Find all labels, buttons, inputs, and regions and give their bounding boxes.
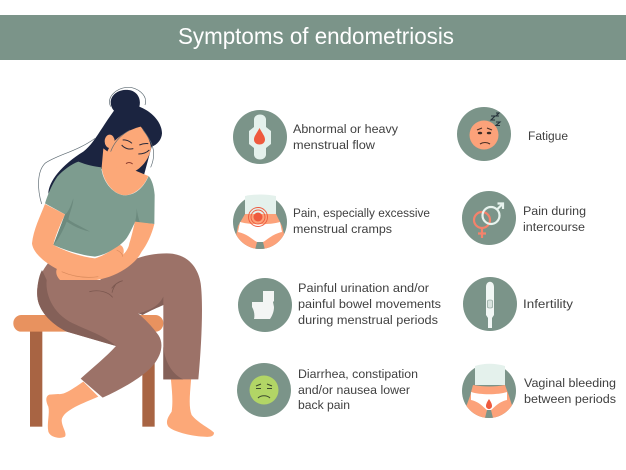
label: Painful urination and/or — [298, 281, 429, 295]
legs and feet — [37, 253, 214, 438]
label — [523, 204, 586, 234]
label — [298, 281, 441, 327]
icon: toilet — [238, 278, 292, 332]
icon: male and female symbols — [462, 191, 516, 245]
t-shirt — [45, 162, 155, 257]
label — [524, 376, 616, 406]
label: Pain, especially excessive — [293, 206, 430, 220]
label: Infertility — [523, 297, 574, 311]
label — [298, 367, 418, 412]
label — [293, 206, 430, 236]
icon: tired orange face — [457, 107, 511, 161]
item: menstrual cramps — [233, 194, 430, 250]
item: infertility — [463, 277, 574, 331]
icon: lower abdomen with bleeding — [462, 364, 516, 418]
ear — [105, 135, 115, 148]
label: Fatigue — [528, 129, 568, 143]
label: back pain — [298, 398, 350, 412]
label: painful bowel movements — [298, 297, 441, 311]
item: abnormal or heavy flow — [233, 110, 399, 164]
item: fatigue — [457, 107, 568, 161]
stool — [13, 315, 163, 427]
item: painful urination — [238, 278, 441, 332]
icon: lower abdomen with pain rings — [233, 194, 288, 250]
label: between periods — [524, 392, 616, 406]
label: intercourse — [523, 220, 585, 234]
item: vaginal bleeding — [462, 364, 616, 418]
item: pain during intercourse — [462, 191, 586, 245]
eyes and mouth — [122, 140, 149, 154]
face — [107, 127, 151, 174]
title banner — [0, 15, 626, 60]
label: Diarrhea, constipation — [298, 367, 418, 381]
arm, left — [32, 204, 124, 277]
label: Pain during — [523, 204, 586, 218]
hair — [48, 90, 162, 194]
arm, right — [56, 222, 154, 280]
icon: sanitary pad — [233, 110, 287, 164]
label — [293, 122, 399, 152]
icon: pregnancy test — [463, 277, 517, 331]
label: Vaginal bleeding — [524, 376, 616, 390]
label: and/or nausea lower — [298, 383, 410, 397]
icon: nauseous green face — [237, 363, 291, 417]
upper body — [32, 87, 162, 280]
label: menstrual cramps — [293, 222, 392, 236]
shirt shading — [53, 198, 140, 245]
item: diarrhea, nausea — [237, 363, 418, 417]
label: Abnormal or heavy — [293, 122, 399, 136]
label: during menstrual periods — [298, 313, 438, 327]
loose hair strands — [110, 87, 146, 107]
label: menstrual flow — [293, 138, 375, 152]
illustration: seated woman holding her abdomen — [13, 87, 214, 438]
neck — [102, 148, 148, 195]
title: Symptoms of endometriosis — [178, 23, 454, 49]
